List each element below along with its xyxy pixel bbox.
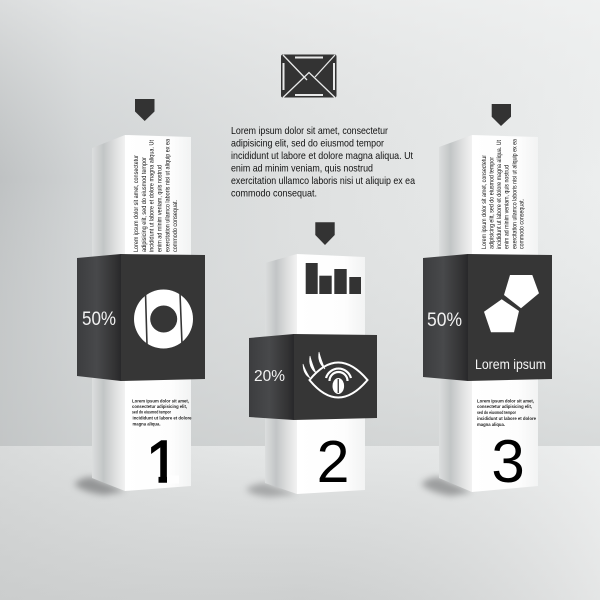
front face 2 — [297, 254, 365, 494]
small text 3: Lorem ipsum dolor sit amet, — [477, 398, 535, 404]
icon: eye — [303, 352, 368, 398]
floor shadow 3 — [421, 477, 472, 496]
paragraph: central text: incididunt ut labore et dolore magna aliqua. Ut — [231, 150, 413, 162]
small text 3 — [477, 398, 536, 428]
floor shadow 2 — [246, 483, 297, 497]
front face 1 — [125, 135, 191, 491]
side face 3 — [439, 135, 472, 492]
pillar 2 — [246, 254, 365, 497]
band front 1 — [121, 254, 205, 381]
small text 1: consectetur adipisicing elit, — [132, 404, 188, 410]
side face 1 — [92, 135, 125, 491]
number 1: 1 — [146, 429, 179, 495]
paragraph: central text: Lorem ipsum dolor sit amet, consectetur — [231, 125, 388, 137]
arrow: pillar 2 marker — [315, 222, 335, 245]
band side 1 — [77, 254, 121, 381]
pillar 1 — [74, 135, 192, 495]
pillar 3 — [421, 135, 538, 496]
small text 1 — [132, 398, 192, 428]
front face 3 — [472, 135, 538, 492]
paragraph: central text: enim ad minim veniam, quis nostrud — [231, 162, 373, 174]
bar chart icon — [306, 263, 361, 294]
rotated text 3: exercitation ullamco laboris nisi ut aliquip ex ea — [511, 139, 518, 249]
band front 3 — [468, 254, 552, 381]
icon: two pentagons — [484, 275, 539, 332]
band front 2 — [294, 334, 377, 420]
rotated text 3: adipisicing elit, sed do eiusmod tempor — [489, 156, 496, 249]
small text 3: magna aliqua. — [477, 422, 506, 428]
small text 1: sed do eiusmod tempor — [132, 410, 171, 416]
dark band 3 — [423, 254, 552, 381]
icon: envelope — [281, 54, 336, 98]
rotated text 1: adipisicing elit, sed do eiusmod tempor — [141, 156, 148, 252]
small text 1: magna aliqua. — [132, 422, 161, 428]
arrow: pillar 3 marker — [492, 104, 511, 126]
paragraph: central text — [231, 125, 415, 200]
rotated text 1: commodo consequat. — [172, 200, 179, 252]
rotated text 3: enim ad minim veniam, quis nostrud — [504, 165, 511, 249]
percentage 1: 50% — [82, 309, 116, 330]
rotated text 1 — [133, 139, 179, 252]
side face 2 — [265, 254, 297, 494]
band label: Lorem ipsum — [475, 356, 546, 372]
paragraph: central text: adipisicing elit, sed do eiusmod tempor — [231, 138, 384, 150]
floor shadow 1 — [74, 477, 125, 495]
number 3: 3 — [491, 428, 525, 495]
percentage 2: 20% — [254, 368, 285, 385]
paragraph: central text: commodo consequat. — [231, 188, 317, 200]
arrow: pillar 1 marker — [135, 99, 154, 121]
rotated text 3: Lorem ipsum dolor sit amet, consectetur — [481, 154, 488, 249]
paragraph: central text: exercitation ullamco laboris nisi ut aliquip ex ea — [231, 175, 415, 187]
rotated text 3: incididunt ut labore et dolore magna aliqua. Ut — [496, 140, 503, 249]
band side 3 — [423, 254, 468, 381]
rotated text 3: commodo consequat. — [519, 199, 526, 249]
small text 3: incididunt ut labore et dolore — [477, 416, 536, 422]
small text 1: incididunt ut labore et dolore — [132, 415, 192, 421]
rotated text 1: Lorem ipsum dolor sit amet, consectetur — [133, 154, 140, 252]
rotated text 3 — [481, 139, 526, 249]
rotated text 1: enim ad minim veniam, quis nostrud — [156, 165, 163, 252]
dark band 2 — [249, 334, 377, 420]
icon: circle with slits — [134, 290, 193, 348]
number 2: 2 — [317, 429, 349, 495]
small text 3: sed do eiusmod tempor — [477, 410, 516, 416]
small text 1: Lorem ipsum dolor sit amet, — [132, 398, 190, 404]
small text 3: consectetur adipisicing elit, — [477, 404, 533, 410]
band side 2 — [249, 334, 294, 420]
percentage 3: 50% — [427, 310, 462, 331]
rotated text 1: exercitation ullamco laboris nisi ut aliquip ex ea — [164, 139, 171, 252]
dark band 1 — [77, 254, 205, 381]
rotated text 1: incididunt ut labore et dolore magna aliqua. Ut — [149, 140, 156, 252]
